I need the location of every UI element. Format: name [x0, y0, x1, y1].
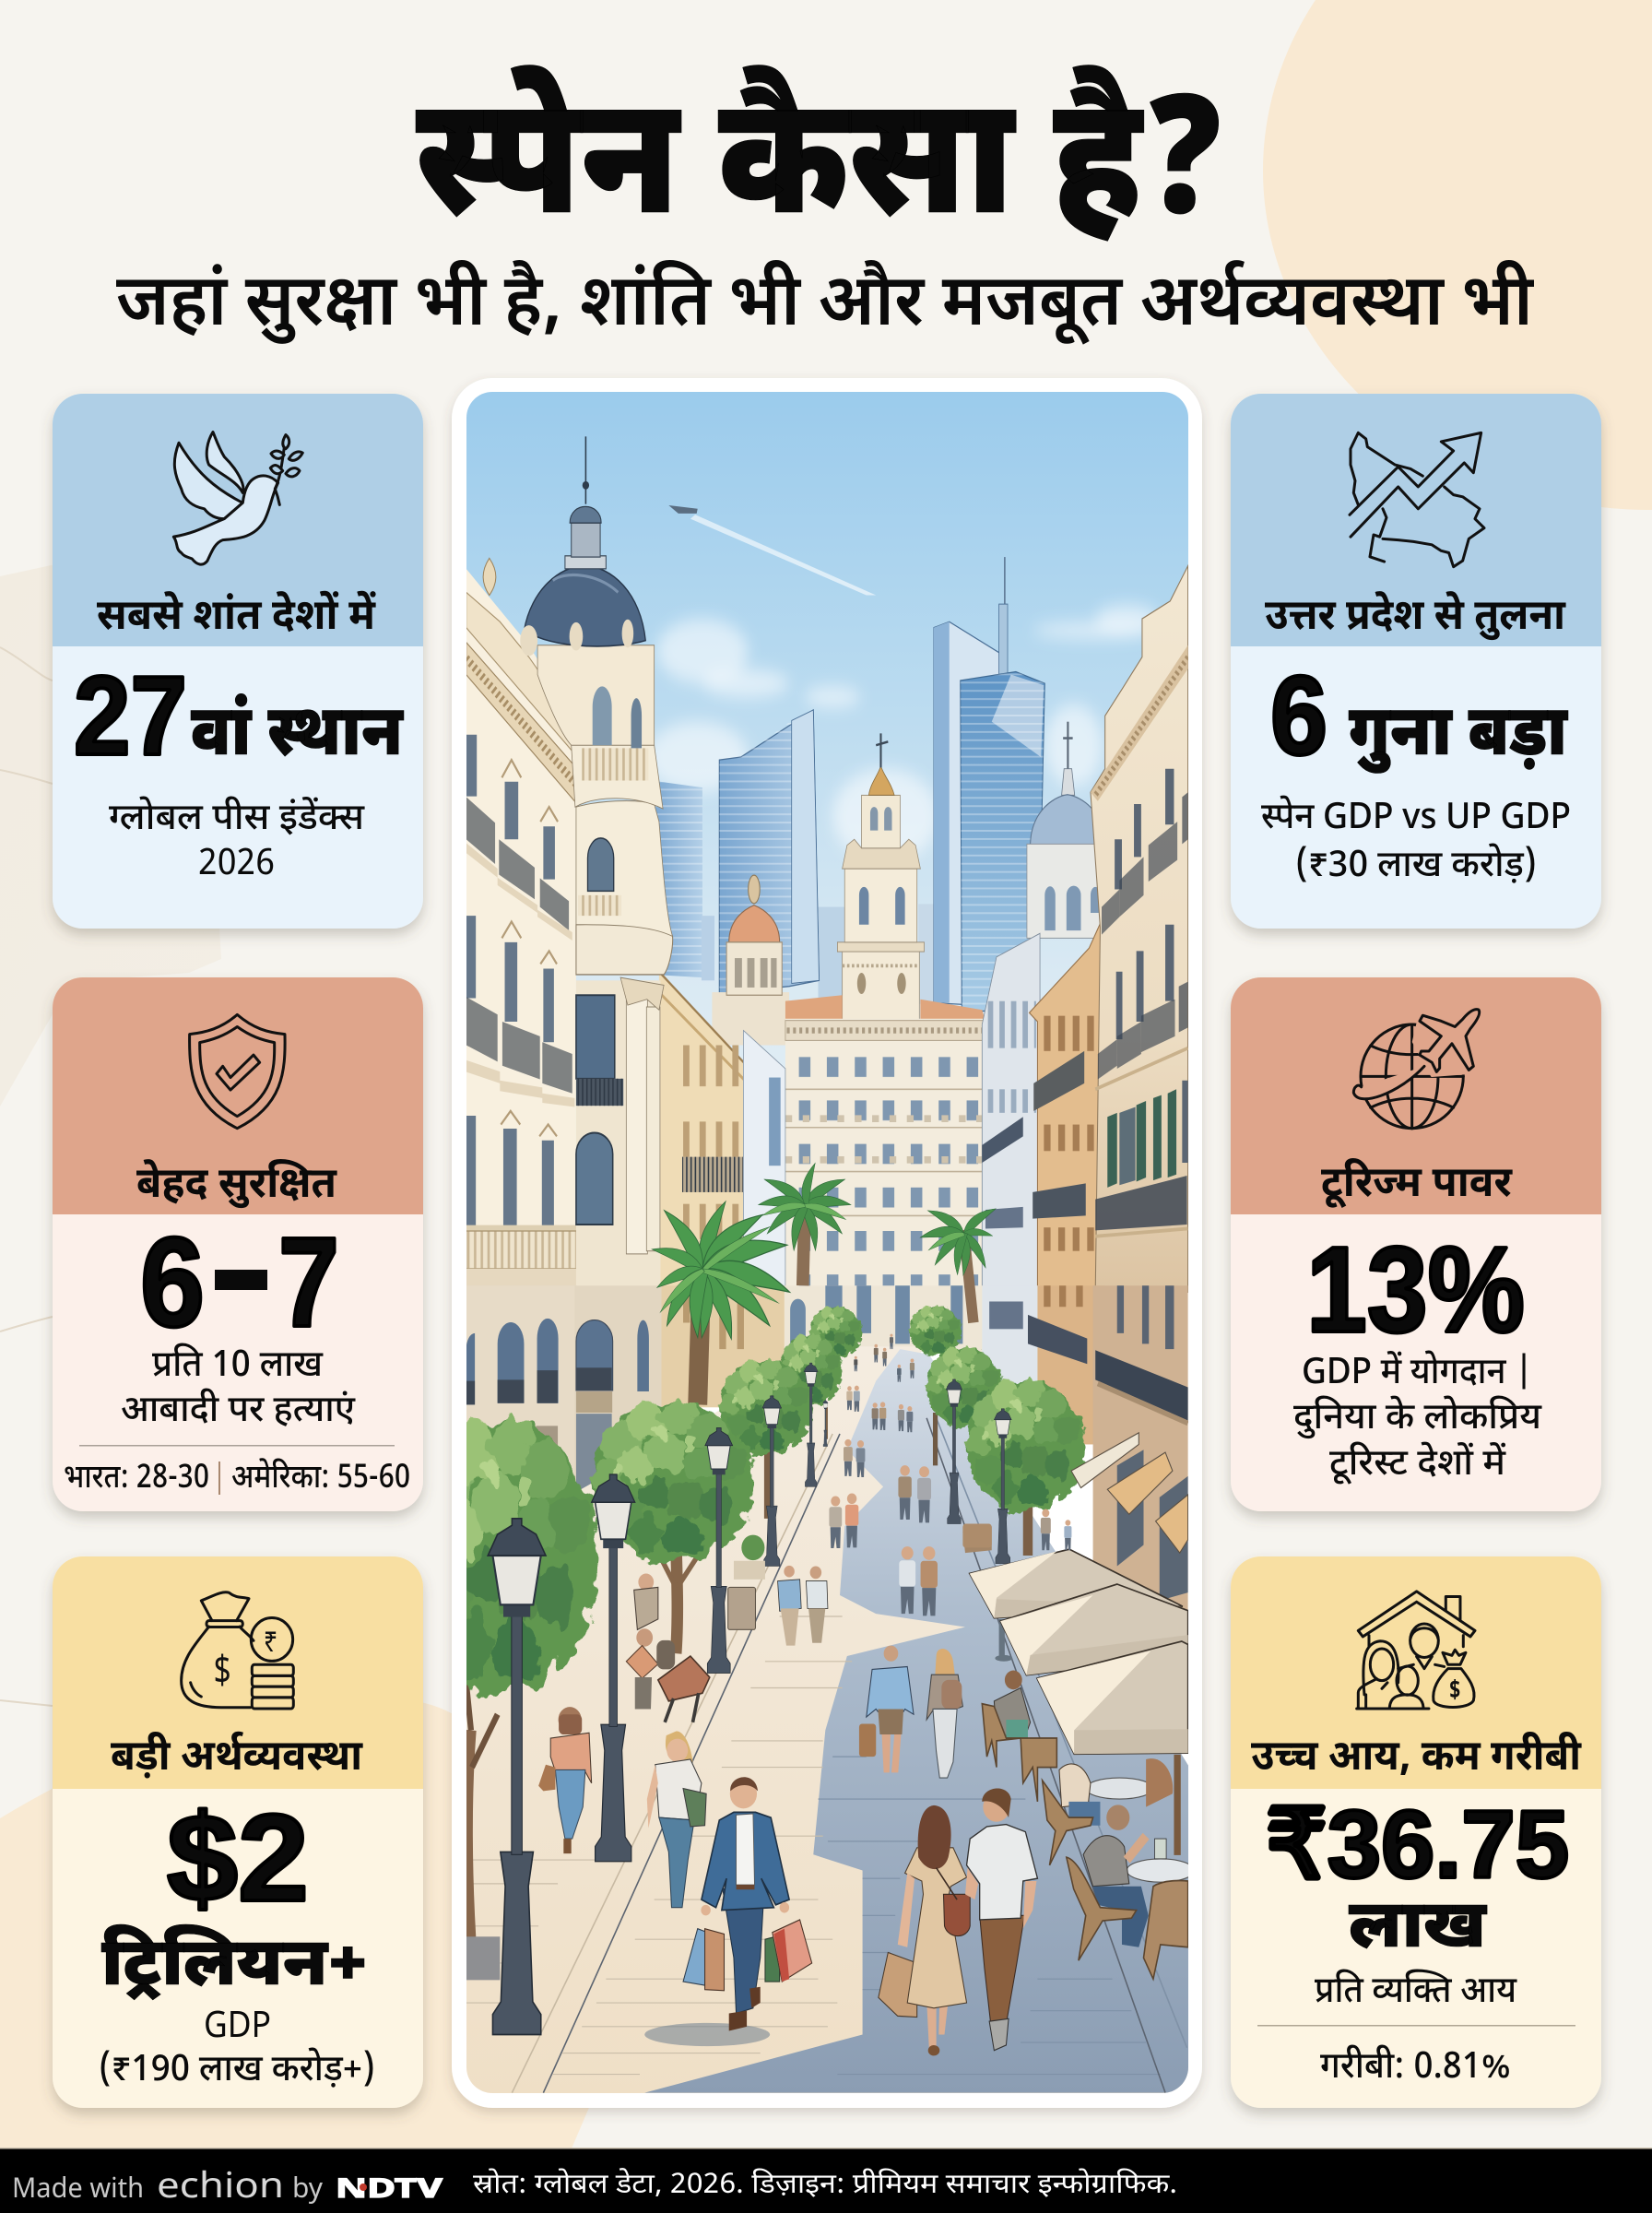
panel: tourism card	[1231, 977, 1601, 1511]
central clock tower	[837, 733, 925, 1031]
stat note: (₹190 लाख करोड़+)	[99, 2048, 375, 2095]
right cream building	[1091, 566, 1188, 1292]
stat note: ग्लोबल पीस इंडेंक्स	[109, 797, 365, 844]
stat: six times	[1270, 653, 1569, 784]
footer bar	[0, 2148, 1652, 2213]
stat: two trillion: ट्रिलियन+	[101, 1924, 368, 2012]
white modern block	[743, 1031, 785, 1292]
stat: rank: 27	[74, 653, 187, 778]
far pedestrians	[829, 1334, 938, 1615]
stat note: प्रति व्यक्ति आय	[1315, 1970, 1517, 2017]
stat note: (₹30 लाख करोड़)	[1295, 844, 1537, 891]
background: peach blob bottom left	[0, 1698, 600, 2148]
photo white frame	[452, 378, 1202, 2108]
palm trees	[652, 1162, 996, 1404]
stat note: 2026	[198, 842, 275, 889]
paving lines	[466, 1616, 852, 2075]
cafe umbrellas	[970, 1549, 1188, 1754]
clouds	[647, 605, 1158, 863]
stat note	[109, 797, 365, 889]
street pavement	[466, 1346, 1189, 2101]
terracotta dome	[712, 875, 789, 1045]
building shadow on street	[644, 1349, 1189, 2093]
stat note: GDP	[204, 2005, 271, 2052]
stat: income	[1266, 1792, 1569, 1974]
stat note: आबादी पर हत्याएं	[121, 1389, 356, 1436]
footer brand: NDTV	[336, 2173, 443, 2208]
left beige building	[659, 972, 747, 1292]
central palace building	[785, 995, 988, 1301]
card heading: बड़ी अर्थव्यवस्था	[111, 1731, 363, 1787]
stat note: दुनिया के लोकप्रिय	[1293, 1396, 1542, 1443]
panel: economy card	[53, 1556, 423, 2108]
icon: UP map with rising arrow	[1350, 432, 1484, 567]
stat note: टूरिस्ट देशों में	[1329, 1442, 1506, 1489]
stat: six times: 6	[1270, 653, 1328, 778]
footer brand: echion	[157, 2166, 284, 2212]
panel: safety card	[53, 977, 423, 1511]
right domed building	[1027, 722, 1106, 938]
panel: peace card	[53, 394, 423, 929]
left tree and trunk	[413, 1415, 596, 1980]
shopfront figures by awnings	[962, 1433, 1188, 1553]
upper part: architecture	[466, 436, 1188, 1301]
stat note	[1293, 1351, 1542, 1489]
icon: money bag and rupee coins	[182, 1592, 293, 1709]
stat: rank: वां स्थान	[191, 692, 404, 784]
stat: homicide rate: 6	[140, 1212, 205, 1354]
left cream building	[466, 557, 576, 1285]
sky	[466, 392, 1188, 1068]
panel: income card	[1231, 1556, 1601, 2108]
icon: house with family and money bag: $	[1449, 1676, 1460, 1708]
stat: rank	[74, 653, 404, 784]
background: torn paper patch left	[0, 564, 277, 1106]
cafe seated guests under second umbrella	[982, 1619, 1056, 1802]
stat: thirteen percent: 13%	[1306, 1222, 1525, 1357]
card heading: उत्तर प्रदेश से तुलना	[1265, 589, 1566, 646]
lower facades	[466, 1285, 1188, 1610]
far trees	[720, 1305, 1002, 1519]
left tower with dome	[520, 436, 673, 1292]
stat note: स्पेन GDP vs UP GDP	[1261, 796, 1571, 843]
card heading: बेहद सुरक्षित	[136, 1157, 337, 1214]
stat: income: लाख	[1349, 1888, 1487, 1974]
stat note	[1261, 796, 1571, 891]
icon: dove with olive branch	[173, 432, 302, 564]
card heading: टूरिज्म पावर	[1321, 1157, 1513, 1213]
stat: two trillion: $2	[167, 1790, 309, 1927]
bin, planter and bench	[658, 1526, 992, 1722]
woman in peach top	[538, 1707, 592, 1853]
airplane and contrail	[668, 505, 876, 596]
icon: globe with airplane	[1353, 1008, 1481, 1129]
stat note	[121, 1343, 356, 1436]
mid trees	[592, 1378, 1084, 1653]
stat: two trillion	[101, 1790, 368, 2012]
man in blue suit with bags	[644, 1777, 812, 2046]
stat: income: ₹36.75	[1266, 1792, 1569, 1899]
card heading: उच्च आय, कम गरीबी	[1251, 1731, 1582, 1787]
back-facing couple in mid distance	[859, 1646, 962, 1778]
curb lines	[512, 1418, 1187, 2093]
subtitle: जहां सुरक्षा भी है, शांति भी और मजबूत अर्थव्यवस्था भी	[116, 259, 1535, 354]
footer brand: by	[292, 2173, 324, 2209]
small couple by the curb	[778, 1566, 828, 1646]
stat: homicide rate	[140, 1212, 339, 1354]
lower part: street scene	[413, 1162, 1194, 2101]
comparison line: अमेरिका: 55-60	[231, 1458, 410, 1501]
comparison line: भारत: 28-30	[64, 1460, 209, 1501]
couple foreground	[879, 1788, 1037, 2055]
card heading: सबसे शांत देशों में	[97, 589, 376, 646]
panel: central street illustration	[413, 378, 1202, 2108]
title: स्पेन कैसा है?	[416, 65, 1227, 279]
footer source text: स्रोत: ग्लोबल डेटा, 2026. डिज़ाइन: प्रीमियम समाचार इन्फोग्राफिक.	[473, 2167, 1177, 2205]
illustration clipped scene	[413, 392, 1194, 2101]
icon: house with family and money bag	[1357, 1592, 1475, 1709]
woman in white top	[647, 1732, 706, 1908]
right white-grey building	[982, 933, 1040, 1292]
near lamps	[488, 1474, 635, 2034]
comparison line	[64, 1445, 410, 1501]
right tan building	[1030, 913, 1105, 1292]
stat: homicide rate: 7	[278, 1212, 339, 1354]
stat note: GDP में योगदान |	[1302, 1351, 1533, 1398]
seated group near tree	[626, 1574, 675, 1709]
icon: money bag and rupee coins: $	[214, 1648, 231, 1700]
footer brand: Made with	[12, 2173, 144, 2209]
background: peach circle top right	[1263, 0, 1652, 510]
icon: shield with check	[190, 1014, 285, 1129]
mid lamps	[705, 1363, 1011, 1673]
cafe tables and furniture	[1043, 1755, 1194, 1979]
poverty line: गरीबी: 0.81%	[1320, 2045, 1511, 2092]
panel: UP comparison card	[1231, 394, 1601, 929]
icon: money bag and rupee coins: ₹	[264, 1623, 277, 1665]
stat note: प्रति 10 लाख	[152, 1343, 324, 1391]
footer brand	[12, 2166, 443, 2212]
skyscrapers	[652, 557, 1044, 1011]
stat: six times: गुना बड़ा	[1349, 692, 1569, 784]
stat note	[99, 2005, 375, 2095]
